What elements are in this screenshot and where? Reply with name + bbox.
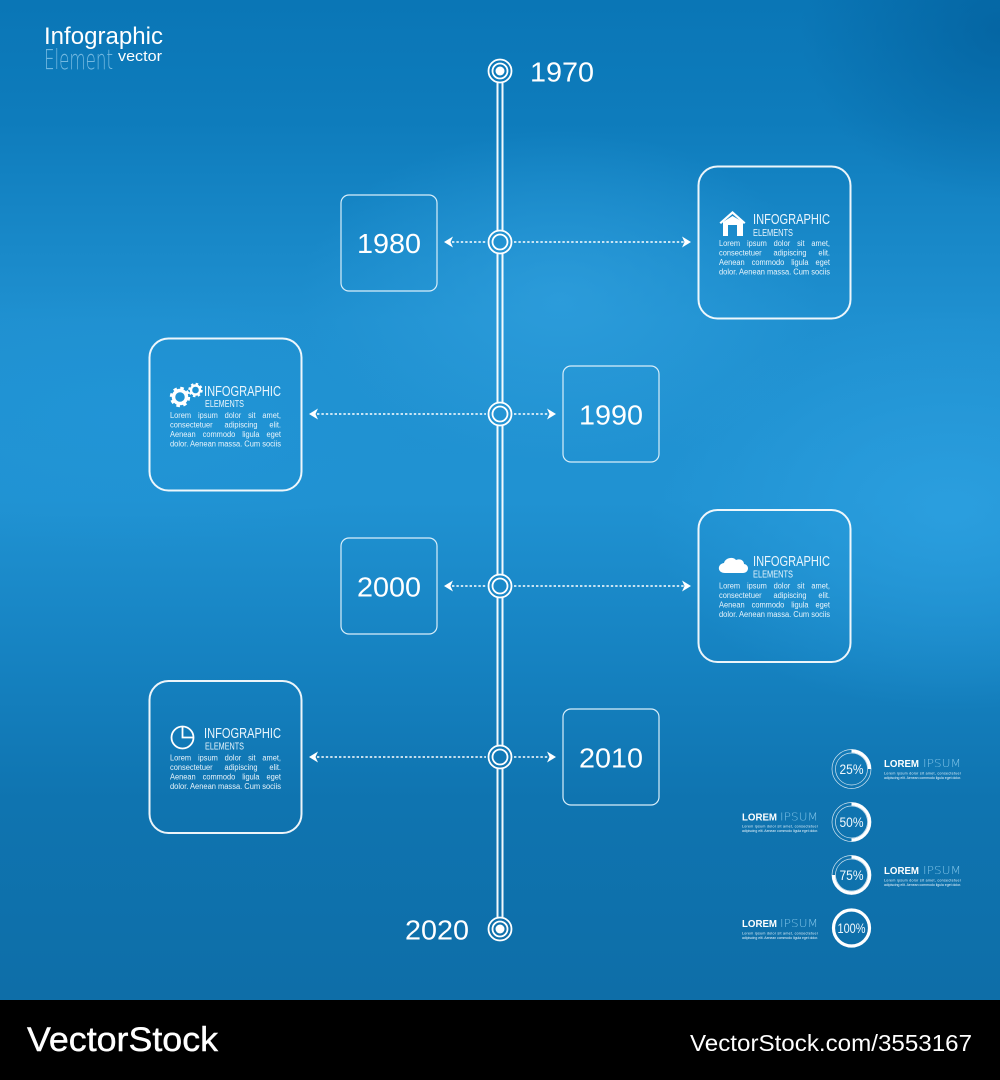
year box 2000 [341,538,437,634]
card body text [170,411,282,448]
title: Infographic [44,23,163,50]
card heading: ELEMENTS [205,742,244,752]
card body text: consectetuer adipiscing elit. [719,591,830,600]
gauge label 100%: adipiscing elit. Aenean commodo ligula eget dolor. [742,936,818,940]
gauge 100% [834,910,870,946]
panel: house card [698,166,850,318]
gauge label 100%: IPSUM [780,917,818,930]
gauge 25%: 25% [840,761,864,777]
icon: gears [171,384,202,406]
panel: pie card [150,681,302,833]
year box 1980 [341,195,437,291]
card body text: Lorem ipsum dolor sit amet, [719,239,830,248]
gauge label 75%: adipiscing elit. Aenean commodo ligula eget dolor. [884,883,961,887]
title [44,23,163,76]
year box 2010: 2010 [579,742,643,774]
year label 1970: 1970 [530,56,594,88]
year box 1990: 1990 [579,400,643,430]
end node 2020 [488,918,512,940]
gauge label 50% [742,810,819,833]
gauge label 25% [884,757,962,780]
gauge 75% [832,856,871,894]
card heading [753,553,830,580]
gauge 50% [832,802,871,842]
card body text: Aenean commodo ligula eget [719,600,831,610]
footer watermark bar: VectorStock.com/3553167 [690,1030,972,1056]
gauge 50%: 50% [840,814,864,830]
gauge label 100%: Lorem ipsum dolor sit amet, consectetuer [742,932,819,936]
gauge label 25%: adipiscing elit. Aenean commodo ligula eget dolor. [884,776,961,780]
year label 2020: 2020 [405,914,469,946]
title: vector [118,48,162,65]
year box 1980: 1980 [357,228,421,259]
year box 2000: 2000 [357,572,421,602]
card body text: Aenean commodo ligula eget [170,772,282,782]
gauge label 75% [884,864,962,887]
card body text [170,754,282,791]
card body text: consectetuer adipiscing elit. [719,248,830,258]
gauge label 100%: LOREM [742,919,777,930]
gauge label 25%: LOREM [884,759,919,770]
gauge 100%: 100% [838,920,866,936]
gauge label 50%: LOREM [742,812,777,824]
footer watermark bar: VectorStock [27,1021,219,1059]
card heading: INFOGRAPHIC [753,553,830,570]
card heading: INFOGRAPHIC [204,725,281,742]
icon: pie chart [172,726,194,748]
card body text: dolor. Aenean massa. Cum sociis [170,440,281,448]
node row 1990 [309,402,556,426]
card body text: Aenean commodo ligula eget [170,430,282,439]
card heading: ELEMENTS [753,228,793,239]
card body text [719,582,831,619]
icon: house [720,211,746,236]
gauge label 75%: IPSUM [923,864,961,877]
gauge 25% [832,750,871,788]
gauge label 100% [742,917,819,940]
panel: cloud card [698,510,850,662]
card body text: dolor. Aenean massa. Cum sociis [719,268,830,276]
card body text: Lorem ipsum dolor sit amet, [719,582,830,590]
node row 2010 [309,746,556,768]
gauge label 50%: adipiscing elit. Aenean commodo ligula eget dolor. [742,829,818,833]
icon: cloud [719,558,748,573]
gauge 75%: 75% [840,867,864,883]
gauge label 75%: Lorem ipsum dolor sit amet, consectetuer [884,878,962,882]
start node 1970 [488,60,512,82]
gauge label 25%: IPSUM [923,757,961,770]
card body text [719,239,831,276]
footer watermark bar [0,1000,1000,1080]
card body text: Lorem ipsum dolor sit amet, [170,411,281,420]
card heading [753,211,830,239]
gauge label 75%: LOREM [884,866,919,877]
panel: gears card [150,338,302,490]
card body text: dolor. Aenean massa. Cum sociis [719,610,830,619]
card body text: consectetuer adipiscing elit. [170,763,281,772]
card body text: Aenean commodo ligula eget [719,258,831,267]
gauge label 25%: Lorem ipsum dolor sit amet, consectetuer [884,772,962,776]
card body text: consectetuer adipiscing elit. [170,420,281,430]
card heading: INFOGRAPHIC [753,211,830,228]
title: Element [44,43,113,76]
card heading [204,725,281,752]
gauge label 50%: Lorem ipsum dolor sit amet, consectetuer [742,824,819,828]
card body text: dolor. Aenean massa. Cum sociis [170,782,281,791]
node row 2000 [444,574,691,598]
card heading [204,383,281,410]
card heading: ELEMENTS [753,570,793,580]
node row 1980 [444,230,691,254]
card body text: Lorem ipsum dolor sit amet, [170,754,281,762]
card heading: INFOGRAPHIC [204,383,281,400]
year box 2010 [563,709,659,805]
timeline spine [498,83,502,917]
year box 1990 [563,366,659,462]
gauge label 50%: IPSUM [780,810,818,824]
card heading: ELEMENTS [205,399,244,410]
